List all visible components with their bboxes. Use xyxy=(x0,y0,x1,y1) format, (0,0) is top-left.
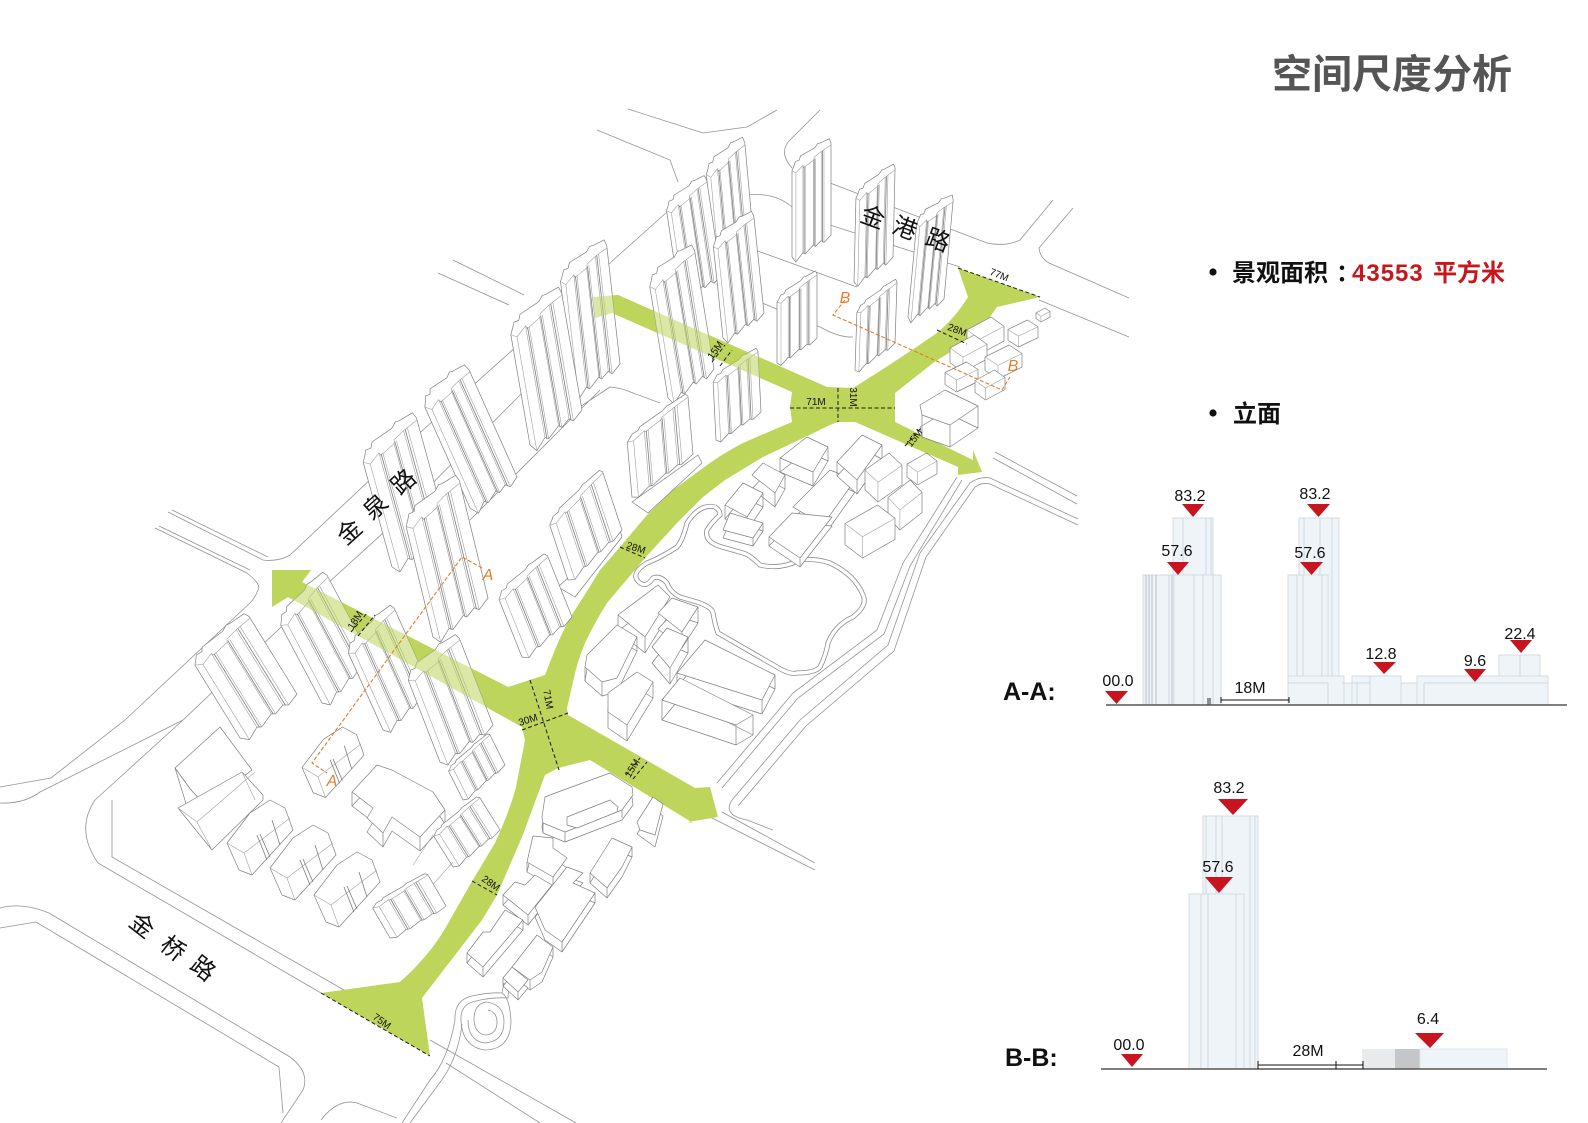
elevation markers A-A: 9.6 xyxy=(1464,653,1486,670)
landscape area statistic: ： xyxy=(1336,260,1360,287)
dimension labels: 15M xyxy=(905,427,925,450)
road network xyxy=(0,109,1129,1123)
elevation markers A-A: 22.4 xyxy=(1504,626,1536,643)
coil path xyxy=(455,983,511,1050)
elevation A-A xyxy=(1003,486,1567,706)
section line A-A: A xyxy=(482,567,493,584)
road name: 金港路: 路 xyxy=(922,224,953,258)
dimension labels: 75M xyxy=(370,1012,393,1032)
road name: 金桥路: 金 xyxy=(124,908,159,944)
road name: 金港路 xyxy=(857,201,953,258)
dimension labels: 31M xyxy=(847,387,858,407)
landscape area statistic: 景观面积 xyxy=(1232,260,1328,287)
dimension labels: 15M xyxy=(706,339,726,362)
road name: 金泉路 xyxy=(332,464,422,550)
elevation markers A-A xyxy=(1102,486,1536,704)
title: 空间尺度分析 xyxy=(1272,53,1512,97)
section line B-B xyxy=(833,290,1019,390)
elevation markers A-A: 57.6 xyxy=(1161,543,1193,560)
dimension lines xyxy=(321,268,1040,1056)
site map: axonometric plan xyxy=(0,109,1129,1123)
dimension labels: 18M xyxy=(346,610,366,632)
dimension labels: 28M xyxy=(625,540,647,557)
elevation B-B xyxy=(1005,780,1547,1072)
dimension labels: 77M xyxy=(988,267,1010,284)
dimension labels: 71M xyxy=(540,689,555,710)
dimension labels: 30M xyxy=(517,712,539,729)
elevation heading: 立面 xyxy=(1233,401,1281,428)
dimension labels: 28M xyxy=(946,322,968,339)
landscape area statistic xyxy=(1209,259,1505,287)
dimension labels xyxy=(346,267,1010,1032)
section line A-A xyxy=(312,557,493,790)
low-rise buildings: north-east villas xyxy=(920,308,1050,447)
high-rise towers xyxy=(188,134,954,769)
elevation markers A-A: 83.2 xyxy=(1299,486,1331,503)
low-rise buildings: central villas xyxy=(585,435,937,745)
elevation markers B-B: 00.0 xyxy=(1113,1037,1145,1054)
ground line B-B xyxy=(1101,1068,1547,1070)
elevation markers B-B: 6.4 xyxy=(1417,1011,1439,1028)
road name: 金桥路 xyxy=(124,908,220,987)
spacing dimension 18M xyxy=(1221,680,1289,703)
spacing dimension 28M xyxy=(1258,1043,1363,1069)
road name: 金泉路: 路 xyxy=(386,464,422,500)
elevation markers A-A: 57.6 xyxy=(1294,545,1326,562)
dimension labels: 71M xyxy=(806,397,826,408)
elevation markers A-A: 12.8 xyxy=(1365,646,1397,663)
section line B-B: B xyxy=(840,290,851,307)
label B-B: B-B: xyxy=(1005,1044,1058,1072)
spacing dimension 28M: 28M xyxy=(1292,1043,1324,1060)
landscape area statistic: 43553 xyxy=(1352,260,1424,287)
buildings B-B xyxy=(1189,816,1507,1069)
elevation markers B-B: 57.6 xyxy=(1202,859,1234,876)
low-rise buildings: west block xyxy=(175,727,506,940)
ground line A-A xyxy=(1106,704,1567,706)
spacing dimension 18M: 18M xyxy=(1234,680,1266,697)
elevation markers B-B: 83.2 xyxy=(1213,780,1245,797)
road name: 金港路: 港 xyxy=(889,212,920,246)
buildings A-A xyxy=(1143,518,1548,705)
road name: 金桥路: 桥 xyxy=(155,931,190,967)
road name: 金泉路: 金 xyxy=(332,514,368,550)
translucent green over towers xyxy=(272,295,827,727)
section line A-A: A xyxy=(326,773,337,790)
low-rise buildings: south-east villas xyxy=(467,773,663,1000)
label A-A: A-A: xyxy=(1003,678,1056,706)
elevation heading xyxy=(1209,401,1281,428)
elevation markers A-A: 83.2 xyxy=(1174,488,1206,505)
elevation markers B-B xyxy=(1113,780,1444,1067)
dimension labels: 15M xyxy=(623,758,643,780)
road name: 金港路: 金 xyxy=(857,201,888,235)
dimension labels: 28M xyxy=(479,874,502,894)
road name: 金桥路: 路 xyxy=(185,951,220,987)
green landscape corridor xyxy=(272,268,1040,1056)
road name: 金泉路: 泉 xyxy=(358,489,394,525)
landscape area statistic: 平方米 xyxy=(1433,259,1505,287)
lake loop path xyxy=(636,506,864,673)
section line B-B: B xyxy=(1008,358,1019,375)
elevation markers A-A: 00.0 xyxy=(1102,673,1134,690)
